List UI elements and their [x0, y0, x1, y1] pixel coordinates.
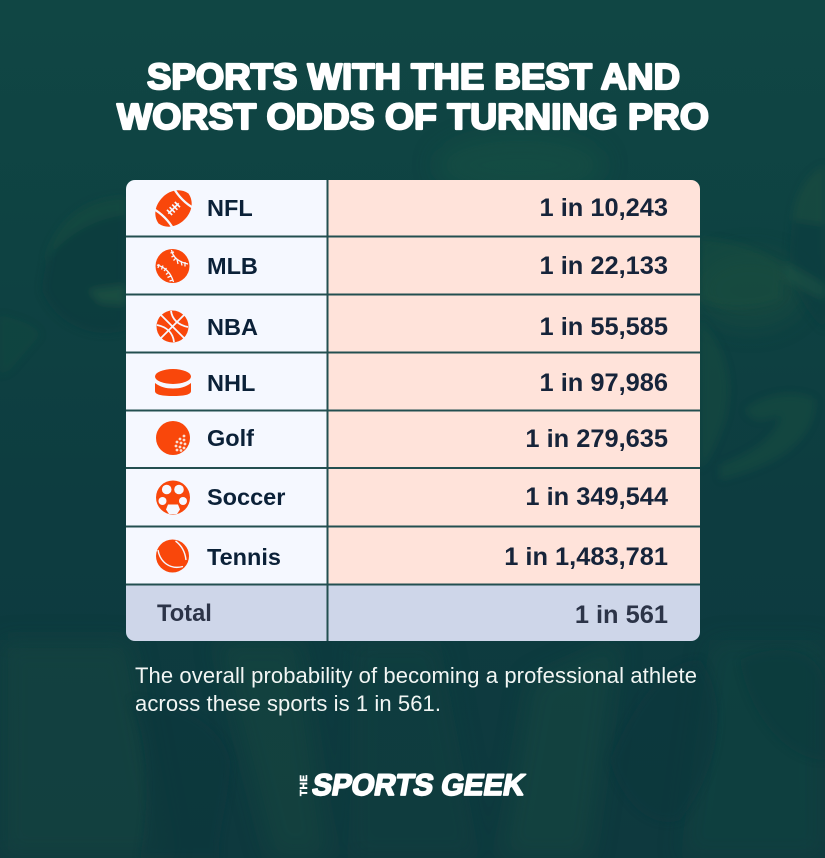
row label: Total: Total	[157, 601, 212, 627]
row label: Tennis: Tennis	[207, 544, 281, 570]
row label: NBA: NBA	[207, 314, 258, 340]
title	[117, 56, 709, 137]
row label: Golf: Golf	[207, 425, 254, 451]
icon: golf ball	[156, 421, 190, 455]
row label: NFL: NFL	[207, 195, 253, 221]
logo: The Sports Geek: THE	[299, 775, 310, 796]
logo: The Sports Geek: SPORTS GEEK	[310, 769, 528, 802]
value: NFL odds: 1 in 10,243	[540, 194, 668, 222]
value: Golf odds: 1 in 279,635	[525, 425, 668, 453]
value: NHL odds: 1 in 97,986	[540, 369, 668, 397]
value: NBA odds: 1 in 55,585	[540, 313, 668, 341]
title: SPORTS WITH THE BEST AND	[147, 56, 680, 97]
icon: basketball	[156, 310, 188, 342]
icon: hockey puck	[155, 369, 191, 396]
icon: football	[147, 182, 200, 235]
row label: NHL: NHL	[207, 370, 255, 396]
row label: MLB: MLB	[207, 253, 258, 279]
row label: Soccer: Soccer	[207, 484, 285, 510]
value: MLB odds: 1 in 22,133	[540, 252, 668, 280]
icon: tennis ball	[156, 540, 189, 572]
icon: soccer ball	[156, 480, 190, 514]
note text: across these sports is 1 in 561.	[135, 691, 441, 716]
value: Total odds: 1 in 561	[575, 601, 668, 629]
value: Soccer odds: 1 in 349,544	[525, 483, 668, 511]
title: WORST ODDS OF TURNING PRO	[117, 96, 709, 137]
odds table	[126, 180, 700, 641]
icon: baseball	[156, 249, 190, 283]
note text: The overall probability of becoming a professional athlete	[135, 663, 697, 688]
note text	[135, 663, 697, 716]
value: Tennis odds: 1 in 1,483,781	[504, 543, 668, 571]
